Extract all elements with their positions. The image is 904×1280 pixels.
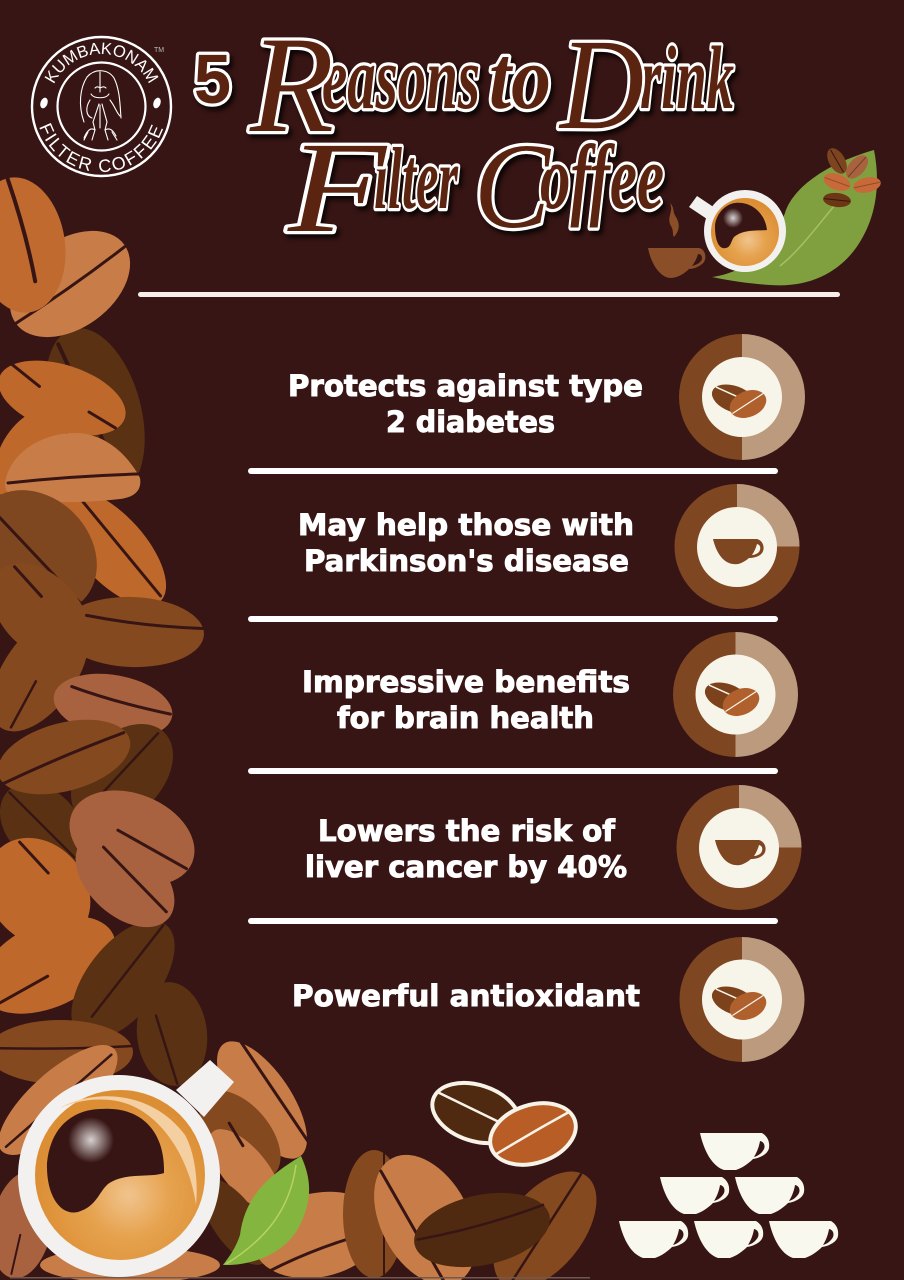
bean: orange lower lobe (0, 897, 131, 1033)
bean pair (708, 981, 770, 1025)
title line 2 (287, 116, 664, 260)
cup 6 (769, 1221, 838, 1258)
logo figure (80, 71, 121, 140)
reason 3 text: for brain health (337, 701, 594, 735)
reason 5 icon: bean donut (680, 937, 805, 1062)
leaf bean 5 (822, 192, 852, 208)
bottom edge line (10, 1277, 590, 1278)
leaf bean 2 (842, 151, 872, 183)
reason 2 text (298, 508, 634, 578)
title line 1: rink (640, 29, 734, 128)
light reflection (60, 1096, 197, 1205)
header divider (138, 292, 840, 297)
leaf bean 4 (852, 175, 882, 195)
dark coffee (47, 1109, 164, 1212)
title (194, 8, 734, 260)
bean: dark mid right (188, 1168, 282, 1276)
bean: brown left lower (0, 596, 108, 748)
bean: brown left upper (0, 544, 108, 680)
trademark: TM (154, 47, 164, 54)
bean: brown far right (473, 1153, 617, 1280)
cup rim (18, 1075, 220, 1277)
bean: pink upper lobe (55, 773, 209, 903)
bean: light right low (246, 1180, 390, 1280)
title line 1: D (558, 13, 644, 157)
divider 1 (248, 468, 778, 474)
coffee beans: bottom pile (0, 1027, 617, 1280)
reason 3 text: Impressive benefits (302, 665, 630, 699)
bean: dark bottom right (132, 979, 212, 1089)
bean: orange upper lobe (0, 817, 112, 967)
bean: orange outlined (482, 1093, 584, 1175)
coffee beans: left column (0, 171, 212, 1089)
cup handle (176, 1060, 234, 1117)
bean: dark diagonal (52, 903, 194, 1057)
stacked cups (619, 1133, 838, 1258)
header coffee cup (689, 190, 786, 272)
bean: orange big diagonal (39, 472, 185, 624)
bean: light under cup (40, 1247, 220, 1280)
bean: dark back right (51, 704, 193, 846)
title line 1: easons (322, 29, 480, 128)
bean: brown far left (0, 1167, 61, 1280)
bean: brown right (59, 595, 205, 669)
outlined beans (425, 1072, 584, 1175)
bean: dark far right (407, 1181, 557, 1279)
bean: orange cluster upper (0, 346, 135, 450)
small brown cup with steam (648, 203, 705, 278)
bean: brown bottom (0, 1020, 133, 1084)
reason 4 text (305, 814, 627, 884)
bean: brown middle (0, 707, 138, 807)
reason 2 icon: cup donut (674, 484, 800, 609)
bean: light dome (5, 433, 140, 502)
leaf bean 1 (823, 145, 851, 177)
bean: orange lower cluster (0, 397, 81, 513)
bean pair (708, 379, 770, 423)
reason 5 text: Powerful antioxidant (292, 979, 640, 1013)
reason 4 icon: cup donut (676, 785, 802, 910)
title line 1: to (489, 29, 551, 128)
logo small beans (39, 97, 162, 109)
bean pair (701, 677, 763, 721)
cup 5 (694, 1221, 763, 1258)
reason 2 text: May help those with (298, 508, 634, 542)
reason 4 text: liver cancer by 40% (305, 850, 627, 884)
large coffee cup (18, 1060, 234, 1277)
logo rings (32, 37, 171, 176)
divider 2 (248, 616, 778, 622)
reason 2 text: Parkinson's disease (304, 544, 629, 578)
leaf bean 3 (821, 170, 853, 194)
header leaf with beans (712, 145, 882, 285)
bean: orange top (0, 171, 74, 319)
bean: light upper left (0, 1028, 133, 1172)
title line 1: R (249, 8, 334, 161)
bean: light mid right (196, 1118, 294, 1222)
title line 2: C (474, 119, 552, 254)
reason 1 icon: bean donut (679, 334, 805, 460)
bean: dark outlined (425, 1072, 527, 1154)
bean: dark vertical (28, 317, 162, 507)
coffee surface (35, 1090, 205, 1260)
reason 1 text (288, 369, 643, 439)
divider 3 (248, 768, 778, 774)
cup 4 (619, 1221, 688, 1258)
logo text top: KUMBAKONAM (44, 42, 158, 84)
highlight (68, 1117, 114, 1163)
cup 1 (700, 1133, 769, 1170)
bean: brown round (0, 465, 122, 639)
title number 5: 5 (194, 40, 231, 118)
bean: brown centre (343, 1150, 405, 1278)
title line 2: F (287, 116, 388, 260)
reason 4 text: Lowers the risk of (318, 814, 615, 848)
reason 1 text: 2 diabetes (386, 405, 555, 439)
title line 1 (249, 8, 734, 161)
reason 3 text (302, 665, 630, 735)
cup 3 (735, 1177, 804, 1214)
reason 1 text: Protects against type (288, 369, 643, 403)
logo: Kumbakonam Filter Coffee (30, 36, 172, 178)
bean: light centre (353, 1138, 497, 1280)
green leaf (223, 1156, 309, 1265)
bean: light top right (200, 1027, 324, 1173)
bean: dark back left (0, 766, 101, 884)
bean: pink (49, 665, 177, 747)
divider 4 (248, 918, 778, 924)
cup 2 (660, 1177, 729, 1214)
title line 2: offee (540, 126, 664, 228)
logo text bottom: FILTER COFFEE (40, 123, 163, 172)
bean: light diagonal (0, 209, 150, 359)
bean: brown mid right (184, 1076, 296, 1194)
bean: pink lower lobe (58, 814, 192, 946)
reason 3 icon: bean donut (673, 632, 798, 757)
title line 2: ilter (374, 131, 458, 228)
